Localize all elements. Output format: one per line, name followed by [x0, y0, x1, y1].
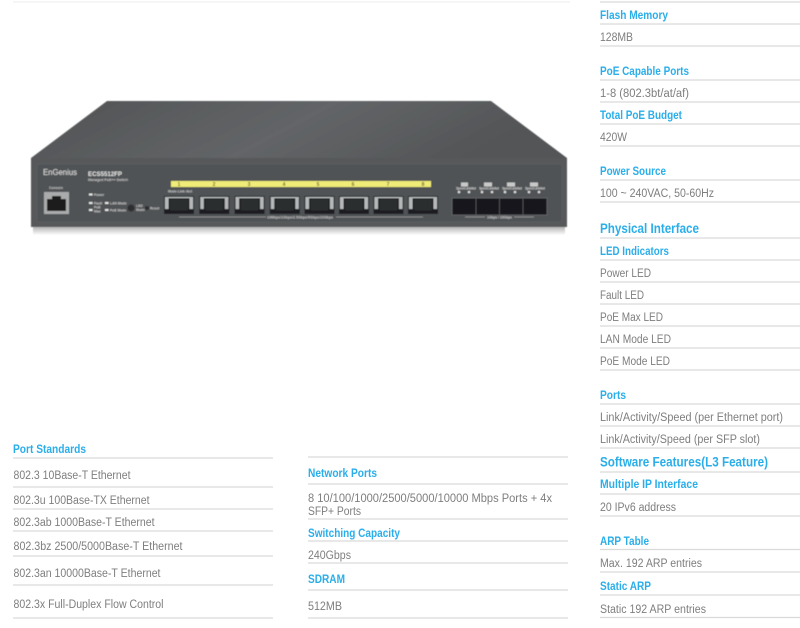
heading: poe capable ports: PoE Capable Ports: [600, 66, 689, 78]
model subtitle: Managed PoE++ Switch: [88, 178, 129, 182]
status LEDs: Max: [94, 210, 101, 214]
item: poe max led: PoE Max LED: [600, 312, 663, 324]
SFP port labels and LEDs: Speed Link/Act: [456, 186, 477, 190]
item: 802.3u: 802.3u 100Base-TX Ethernet: [14, 495, 150, 507]
item: 802.3an: 802.3an 10000Base-T Ethernet: [14, 568, 161, 580]
SFP speed label: 1Gbps / 10Gbps: [487, 216, 512, 220]
value: arp table: Max. 192 ARP entries: [600, 558, 702, 570]
model name: ECS5512FP: [88, 172, 122, 178]
item: 802.3: 802.3 10Base-T Ethernet: [14, 470, 131, 482]
panel: software features: [600, 454, 800, 618]
status LEDs: PoE: [94, 206, 101, 210]
status LEDs: [89, 193, 160, 214]
value: static arp: Static 192 ARP entries: [600, 604, 706, 616]
yellow port number strip: 5: [317, 182, 320, 188]
heading: arp table: ARP Table: [600, 536, 649, 548]
product photo: network switch: [31, 101, 567, 235]
heading: sdram: SDRAM: [308, 574, 345, 586]
value: flash memory: 128MB: [600, 32, 633, 44]
top divider: [13, 1, 570, 3]
yellow port number strip: 6: [352, 182, 355, 188]
SFP port labels and LEDs: Speed Link/Act: [525, 186, 546, 190]
yellow port number strip: 4: [283, 182, 286, 188]
switch front inner panel: [37, 164, 562, 222]
value: poe capable ports: 1-8 (802.3bt/at/af): [600, 88, 689, 100]
ethernet ports: [164, 196, 438, 214]
item: poe mode led: PoE Mode LED: [600, 356, 670, 368]
switch front face: [31, 158, 567, 227]
value: multiple ip interface: 20 IPv6 address: [600, 502, 676, 514]
heading: power source: Power Source: [600, 166, 666, 178]
item: 802.3x: 802.3x Full-Duplex Flow Control: [14, 599, 164, 611]
heading: led indicators: LED Indicators: [600, 246, 669, 258]
status LEDs: LED: [136, 204, 143, 208]
SFP port labels and LEDs: Speed Link/Act: [479, 186, 500, 190]
panel: hardware specifications: [600, 2, 800, 202]
yellow port number strip: [171, 181, 431, 188]
status LEDs: Reset: [150, 206, 160, 210]
heading: network ports: Network Ports: [308, 468, 377, 480]
status LEDs: Fault: [94, 202, 103, 206]
value: network ports: 8 10/100/1000/2500/5000/10000 Mbps Ports + 4x: [308, 493, 552, 505]
heading: physical interface: Physical Interface: [600, 221, 699, 236]
item: sfp slot speed: Link/Activity/Speed (per SFP slot): [600, 434, 760, 446]
item: fault led: Fault LED: [600, 290, 644, 302]
SFP port labels and LEDs: Speed Link/Act: [502, 186, 523, 190]
switch shadow: [33, 227, 565, 235]
SFP speed label: [465, 216, 534, 220]
yellow port number strip: 7: [387, 182, 390, 188]
heading: flash memory: Flash Memory: [600, 10, 669, 22]
heading: total poe budget: Total PoE Budget: [600, 110, 682, 122]
heading: port standards: Port Standards: [13, 444, 86, 456]
console label: Console: [49, 186, 63, 190]
yellow port number strip: 8: [422, 182, 425, 188]
status LEDs: Mode: [136, 208, 145, 212]
switch top cover: [31, 101, 567, 158]
brand logo: EnGenius: [43, 167, 77, 177]
heading: multiple ip interface: Multiple IP Interface: [600, 479, 698, 491]
yellow port number strip: 3: [248, 182, 251, 188]
item: lan mode led: LAN Mode LED: [600, 334, 671, 346]
value: power source: 100 ~ 240VAC, 50-60Hz: [600, 188, 714, 200]
yellow port number strip: 2: [213, 182, 216, 188]
value: total poe budget: 420W: [600, 132, 627, 144]
heading: ports: Ports: [600, 390, 626, 402]
ethernet speed label: 10Mbps/1Gbps/2.5Gbps/5Gbps/10Gbps: [267, 216, 333, 220]
item: ethernet port speed: Link/Activity/Speed (per Ethernet port): [600, 412, 783, 424]
value: switching capacity: 240Gbps: [308, 550, 351, 562]
SFP port labels and LEDs: [456, 182, 546, 193]
status LEDs: Power: [94, 193, 105, 197]
heading: static arp: Static ARP: [600, 581, 651, 593]
item: 802.3bz: 802.3bz 2500/5000Base-T Ethernet: [14, 541, 183, 553]
heading: software features: Software Features(L3 Feature): [600, 454, 768, 470]
value: sfp ports: SFP+ Ports: [308, 506, 361, 518]
panel: physical interface: [600, 221, 800, 448]
status LEDs: PoE Mode: [110, 208, 127, 212]
item: 802.3ab: 802.3ab 1000Base-T Ethernet: [14, 517, 155, 529]
panel: network and capacity: [308, 457, 568, 618]
SFP cage ports: [452, 198, 547, 215]
item: power led: Power LED: [600, 268, 651, 280]
value: sdram: 512MB: [308, 601, 342, 613]
console port: [44, 192, 69, 214]
status LEDs: LAN Mode: [110, 202, 127, 206]
yellow port number strip: 1: [178, 182, 181, 188]
heading: switching capacity: Switching Capacity: [308, 528, 401, 540]
port mode labels: Mode Link /Act: [168, 190, 193, 194]
panel: port standards: [13, 444, 273, 618]
